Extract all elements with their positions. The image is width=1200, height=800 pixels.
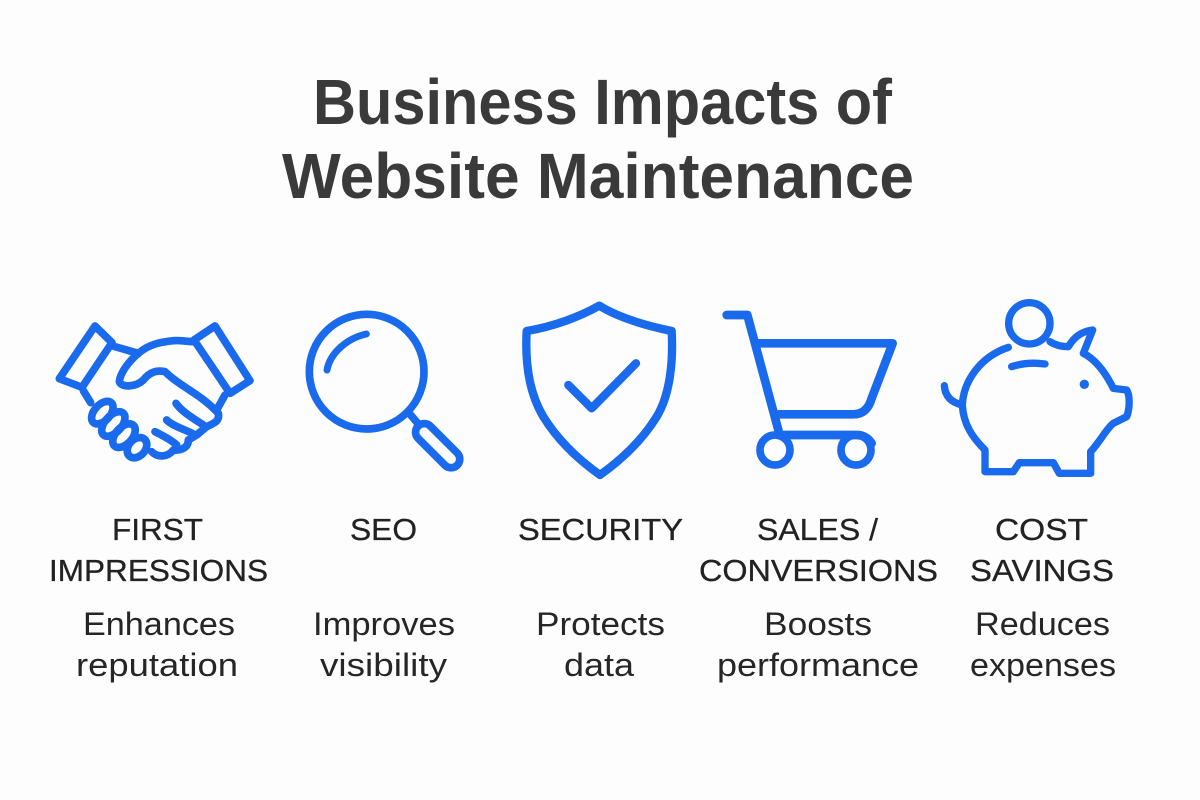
- column: first impressions: [49, 512, 268, 683]
- column: seo: visibility: [320, 647, 447, 683]
- column: sales and conversions: [699, 512, 938, 683]
- column: security: SECURITY: [518, 512, 683, 547]
- icon: piggy bank: [944, 303, 1129, 473]
- column: cost savings: expenses: [970, 647, 1116, 683]
- column: sales and conversions: Boosts: [764, 606, 872, 642]
- column: sales and conversions: SALES /: [757, 512, 878, 547]
- column: cost savings: SAVINGS: [970, 553, 1114, 588]
- icon: magnifying glass: [309, 314, 463, 471]
- title: [282, 66, 914, 212]
- column: cost savings: [970, 512, 1116, 683]
- title: Website Maintenance: [282, 140, 914, 212]
- column: seo: SEO: [350, 512, 417, 547]
- column: first impressions: FIRST: [112, 512, 203, 547]
- icon: handshake: [59, 326, 250, 462]
- column: sales and conversions: CONVERSIONS: [699, 553, 938, 588]
- column: first impressions: IMPRESSIONS: [49, 553, 268, 588]
- column: security: data: [564, 647, 634, 683]
- column: first impressions: reputation: [76, 647, 238, 683]
- column: cost savings: COST: [995, 512, 1088, 547]
- column: cost savings: Reduces: [975, 606, 1110, 642]
- column: seo: Improves: [313, 606, 455, 642]
- title: Business Impacts of: [313, 66, 893, 138]
- column: first impressions: Enhances: [83, 606, 235, 642]
- column: sales and conversions: performance: [717, 647, 919, 683]
- column: security: [518, 512, 683, 683]
- column: seo: [313, 512, 455, 683]
- icon: shopping cart: [727, 315, 893, 465]
- icon: shield with check: [526, 306, 672, 475]
- column: security: Protects: [536, 606, 665, 642]
